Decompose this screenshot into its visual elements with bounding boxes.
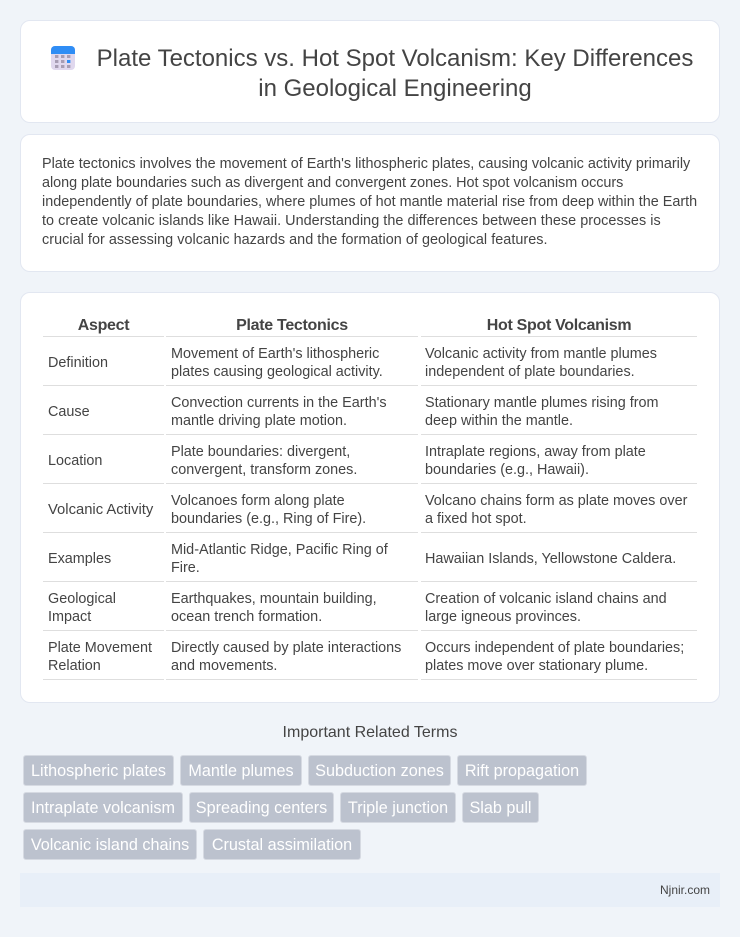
tag: lithospheric plates — [23, 755, 174, 786]
title: Plate Tectonics vs. Hot Spot Volcanism: Key Differences — [97, 45, 693, 72]
plate movement relation: hot spot volcanism: Occurs independent of plate boundaries; — [425, 640, 684, 656]
tag: triple junction — [340, 792, 456, 823]
row: examples: Examples — [48, 551, 111, 567]
table header: plate tectonics: Plate Tectonics — [236, 317, 348, 334]
tag: rift propagation — [457, 755, 587, 786]
examples: hot spot volcanism: Hawaiian Islands, Yellowstone Caldera. — [425, 551, 676, 567]
examples: plate tectonics: Fire. — [171, 560, 200, 576]
volcanic activity: plate tectonics: Volcanoes form along plate — [171, 493, 345, 509]
cause: plate tectonics: mantle driving plate motion. — [171, 413, 347, 429]
text block: introduction — [42, 156, 697, 248]
definition: hot spot volcanism — [425, 346, 657, 380]
tag: mantle plumes: Mantle plumes — [188, 762, 294, 780]
footer credit: Njnir.com — [660, 883, 710, 897]
text block: introduction: independently of plate boundaries, where plumes of hot mantle material rise from deep within the Earth — [42, 194, 697, 210]
definition: hot spot volcanism: independent of plate boundaries. — [425, 364, 635, 380]
row: geological impact: Geological — [48, 591, 116, 607]
location: hot spot volcanism — [425, 444, 646, 478]
text block: introduction: Plate tectonics involves the movement of Earth's lithospheric plates, causing volcanic activity primarily — [42, 156, 690, 172]
cause: hot spot volcanism: Stationary mantle plumes rising from — [425, 395, 659, 411]
panel: header card — [20, 20, 720, 123]
location: plate tectonics: convergent, transform zones. — [171, 462, 357, 478]
heading: important related terms: Important Related Terms — [283, 724, 457, 741]
tag: mantle plumes — [180, 755, 302, 786]
volcanic activity: hot spot volcanism: a fixed hot spot. — [425, 511, 527, 527]
plate movement relation: plate tectonics — [171, 640, 401, 674]
row: location: Location — [48, 453, 102, 469]
panel: introduction card — [20, 134, 720, 272]
footer bar — [20, 873, 720, 907]
plate movement relation: plate tectonics: and movements. — [171, 658, 277, 674]
title — [97, 45, 693, 102]
volcanic activity: plate tectonics: boundaries (e.g., Ring of Fire). — [171, 511, 366, 527]
row: geological impact: Impact — [48, 609, 91, 625]
plate movement relation: hot spot volcanism — [425, 640, 684, 674]
tag: slab pull — [462, 792, 539, 823]
tag: subduction zones — [308, 755, 451, 786]
row: cause: Cause — [48, 404, 90, 420]
geological impact: plate tectonics — [171, 591, 377, 625]
tag: subduction zones: Subduction zones — [315, 762, 444, 780]
plate movement relation: hot spot volcanism: plates move over stationary plume. — [425, 658, 648, 674]
location: hot spot volcanism: boundaries (e.g., Hawaii). — [425, 462, 589, 478]
tag: triple junction: Triple junction — [348, 799, 448, 817]
volcanic activity: hot spot volcanism — [425, 493, 688, 527]
tag: volcanic island chains — [23, 829, 197, 860]
cause: plate tectonics — [171, 395, 387, 429]
definition: plate tectonics: plates causing geological activity. — [171, 364, 383, 380]
location: plate tectonics — [171, 444, 357, 478]
definition: plate tectonics: Movement of Earth's lithospheric — [171, 346, 379, 362]
volcanic activity: hot spot volcanism: Volcano chains form as plate moves over — [425, 493, 687, 509]
title: in Geological Engineering — [258, 75, 532, 102]
tag: spreading centers: Spreading centers — [196, 799, 327, 817]
tag: slab pull: Slab pull — [469, 799, 532, 817]
geological impact: plate tectonics: Earthquakes, mountain building, — [171, 591, 377, 607]
geological impact: hot spot volcanism — [425, 591, 667, 625]
row: geological impact — [48, 591, 116, 625]
tag: intraplate volcanism — [23, 792, 183, 823]
row: plate movement relation: Relation — [48, 658, 101, 674]
tag: rift propagation: Rift propagation — [465, 762, 579, 780]
volcanic activity: plate tectonics — [171, 493, 366, 527]
row: definition: Definition — [48, 355, 108, 371]
tag: intraplate volcanism: Intraplate volcanism — [31, 799, 175, 817]
panel: comparison table card — [20, 292, 720, 703]
examples: plate tectonics: Mid-Atlantic Ridge, Pacific Ring of — [171, 542, 388, 558]
geological impact: hot spot volcanism: Creation of volcanic island chains and — [425, 591, 667, 607]
location: hot spot volcanism: Intraplate regions, away from plate — [425, 444, 646, 460]
row: volcanic activity: Volcanic Activity — [48, 502, 153, 518]
location: plate tectonics: Plate boundaries: divergent, — [171, 444, 350, 460]
icon: calendar grid — [51, 46, 75, 70]
tag: crustal assimilation — [203, 829, 361, 860]
cause: hot spot volcanism — [425, 395, 659, 429]
tag: spreading centers — [189, 792, 334, 823]
tag: crustal assimilation: Crustal assimilation — [212, 836, 352, 854]
text block: introduction: along plate boundaries such as divergent and convergent zones. Hot spot volcanism occurs — [42, 175, 623, 191]
table header: aspect: Aspect — [78, 317, 129, 334]
table header: hot spot volcanism: Hot Spot Volcanism — [487, 317, 631, 334]
geological impact: hot spot volcanism: large igneous provinces. — [425, 609, 581, 625]
row: plate movement relation — [48, 640, 152, 674]
tag: volcanic island chains: Volcanic island chains — [31, 836, 189, 854]
examples: plate tectonics — [171, 542, 388, 576]
plate movement relation: plate tectonics: Directly caused by plate interactions — [171, 640, 401, 656]
row: plate movement relation: Plate Movement — [48, 640, 152, 656]
text block: introduction: crucial for assessing volcanic hazards and the formation of geological features. — [42, 232, 548, 248]
cause: hot spot volcanism: deep within the mantle. — [425, 413, 573, 429]
tag: lithospheric plates: Lithospheric plates — [31, 762, 166, 780]
definition: hot spot volcanism: Volcanic activity from mantle plumes — [425, 346, 657, 362]
cause: plate tectonics: Convection currents in the Earth's — [171, 395, 387, 411]
text block: introduction: to create volcanic islands like Hawaii. Understanding the differences between these processes is — [42, 213, 661, 229]
geological impact: plate tectonics: ocean trench formation. — [171, 609, 322, 625]
definition: plate tectonics — [171, 346, 383, 380]
